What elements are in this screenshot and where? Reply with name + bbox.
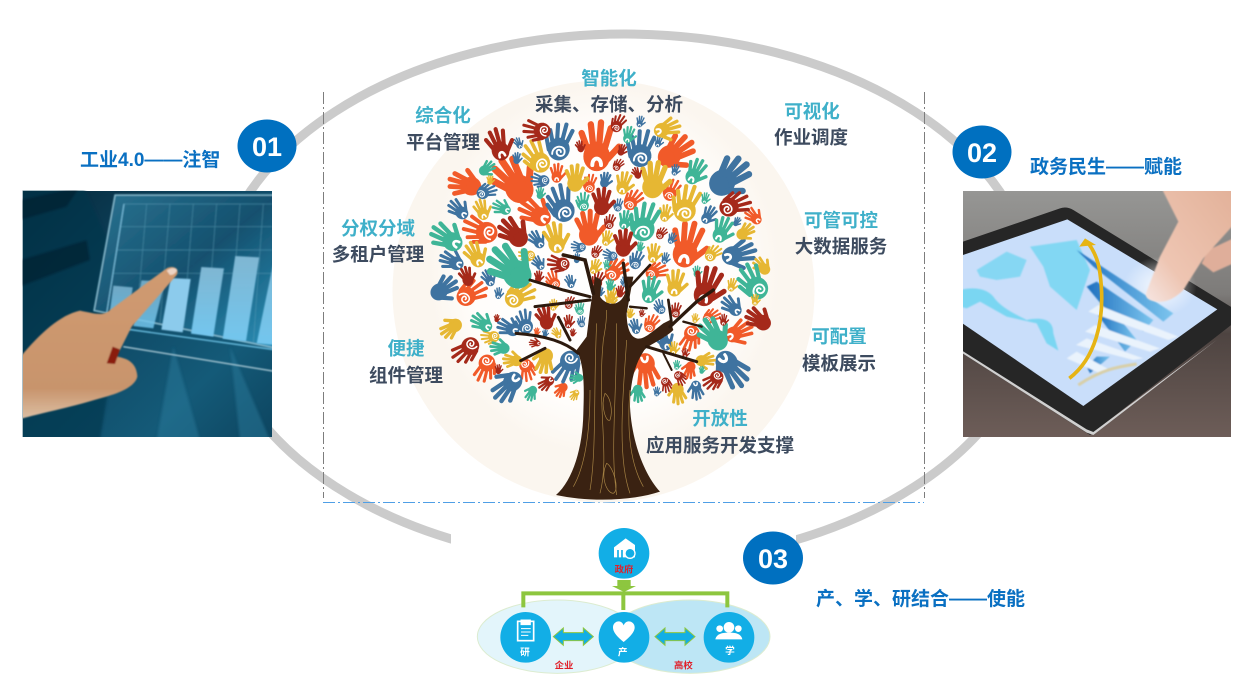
- node: study: 学: [725, 645, 735, 657]
- tree background circle: [392, 80, 814, 502]
- label: 智能化: [535, 68, 683, 115]
- tree trunk and branches: [516, 255, 713, 500]
- node: production: [599, 612, 649, 663]
- label: 便捷: [369, 338, 443, 386]
- badge 02: 02: [967, 138, 997, 168]
- label: 可视化: 作业调度: [774, 127, 848, 148]
- label: 开放性: 应用服务开发支撑: [646, 435, 794, 456]
- node: study: [704, 612, 754, 663]
- label: 综合化: [406, 105, 480, 153]
- large grey ring: [215, 34, 1035, 580]
- badge 01: [238, 120, 296, 172]
- enterprise ellipse: [477, 600, 637, 673]
- label: 开放性: [646, 408, 794, 456]
- label: 分权分域: 分权分域: [341, 218, 415, 239]
- label: 开放性: 开放性: [692, 408, 748, 429]
- badge 03: [743, 532, 803, 584]
- canopy glow: [429, 85, 779, 455]
- label: 智能化: 采集、存储、分析: [535, 94, 683, 115]
- label: 可视化: [774, 101, 848, 148]
- badge 02: [952, 126, 1012, 178]
- green connectors: [523, 580, 727, 610]
- badge 01: 01: [252, 132, 282, 162]
- label: 智能化: 智能化: [581, 68, 637, 89]
- arrow: production to study: [655, 628, 695, 645]
- label: 可管可控: [795, 210, 887, 257]
- label: 便捷: 组件管理: [369, 365, 443, 386]
- badge 03: 03: [758, 544, 788, 574]
- label: 分权分域: 多租户管理: [332, 244, 425, 265]
- label: 可视化: 可视化: [784, 101, 840, 122]
- tree canopy of hands: [427, 112, 776, 406]
- label: 综合化: 综合化: [415, 105, 471, 126]
- label: 可配置: [802, 326, 876, 374]
- label: 分权分域: [332, 218, 425, 265]
- heading: 产学研: 产、学、研结合——使能: [816, 587, 1025, 610]
- arrow: research to production: [553, 628, 593, 645]
- node: research: 研: [520, 648, 530, 659]
- label: 综合化: 平台管理: [406, 132, 480, 153]
- dashed frame: [323, 92, 924, 502]
- label: 可管可控: 大数据服务: [795, 236, 887, 257]
- node: research: [500, 612, 551, 663]
- heading: 政务民生: 政务民生——赋能: [1030, 156, 1182, 178]
- photo: tablet with world map and chart: [960, 188, 1233, 437]
- photo: hand touching chart screen: [20, 187, 277, 440]
- university ellipse: [610, 600, 770, 673]
- label: 可配置: 可配置: [811, 326, 867, 347]
- label: 便捷: 便捷: [387, 338, 425, 359]
- label: university: 高校: [674, 660, 693, 671]
- node: production: 产: [618, 647, 628, 659]
- node: government: 政府: [615, 564, 633, 575]
- label: enterprise: 企业: [555, 660, 573, 671]
- diagram: government, industry, research, academia: [477, 528, 770, 673]
- label: 可管可控: 可管可控: [804, 210, 878, 231]
- node: government: [599, 528, 649, 579]
- heading: 工业4.0: 工业4.0——注智: [80, 149, 220, 171]
- label: 可配置: 模板展示: [802, 353, 876, 374]
